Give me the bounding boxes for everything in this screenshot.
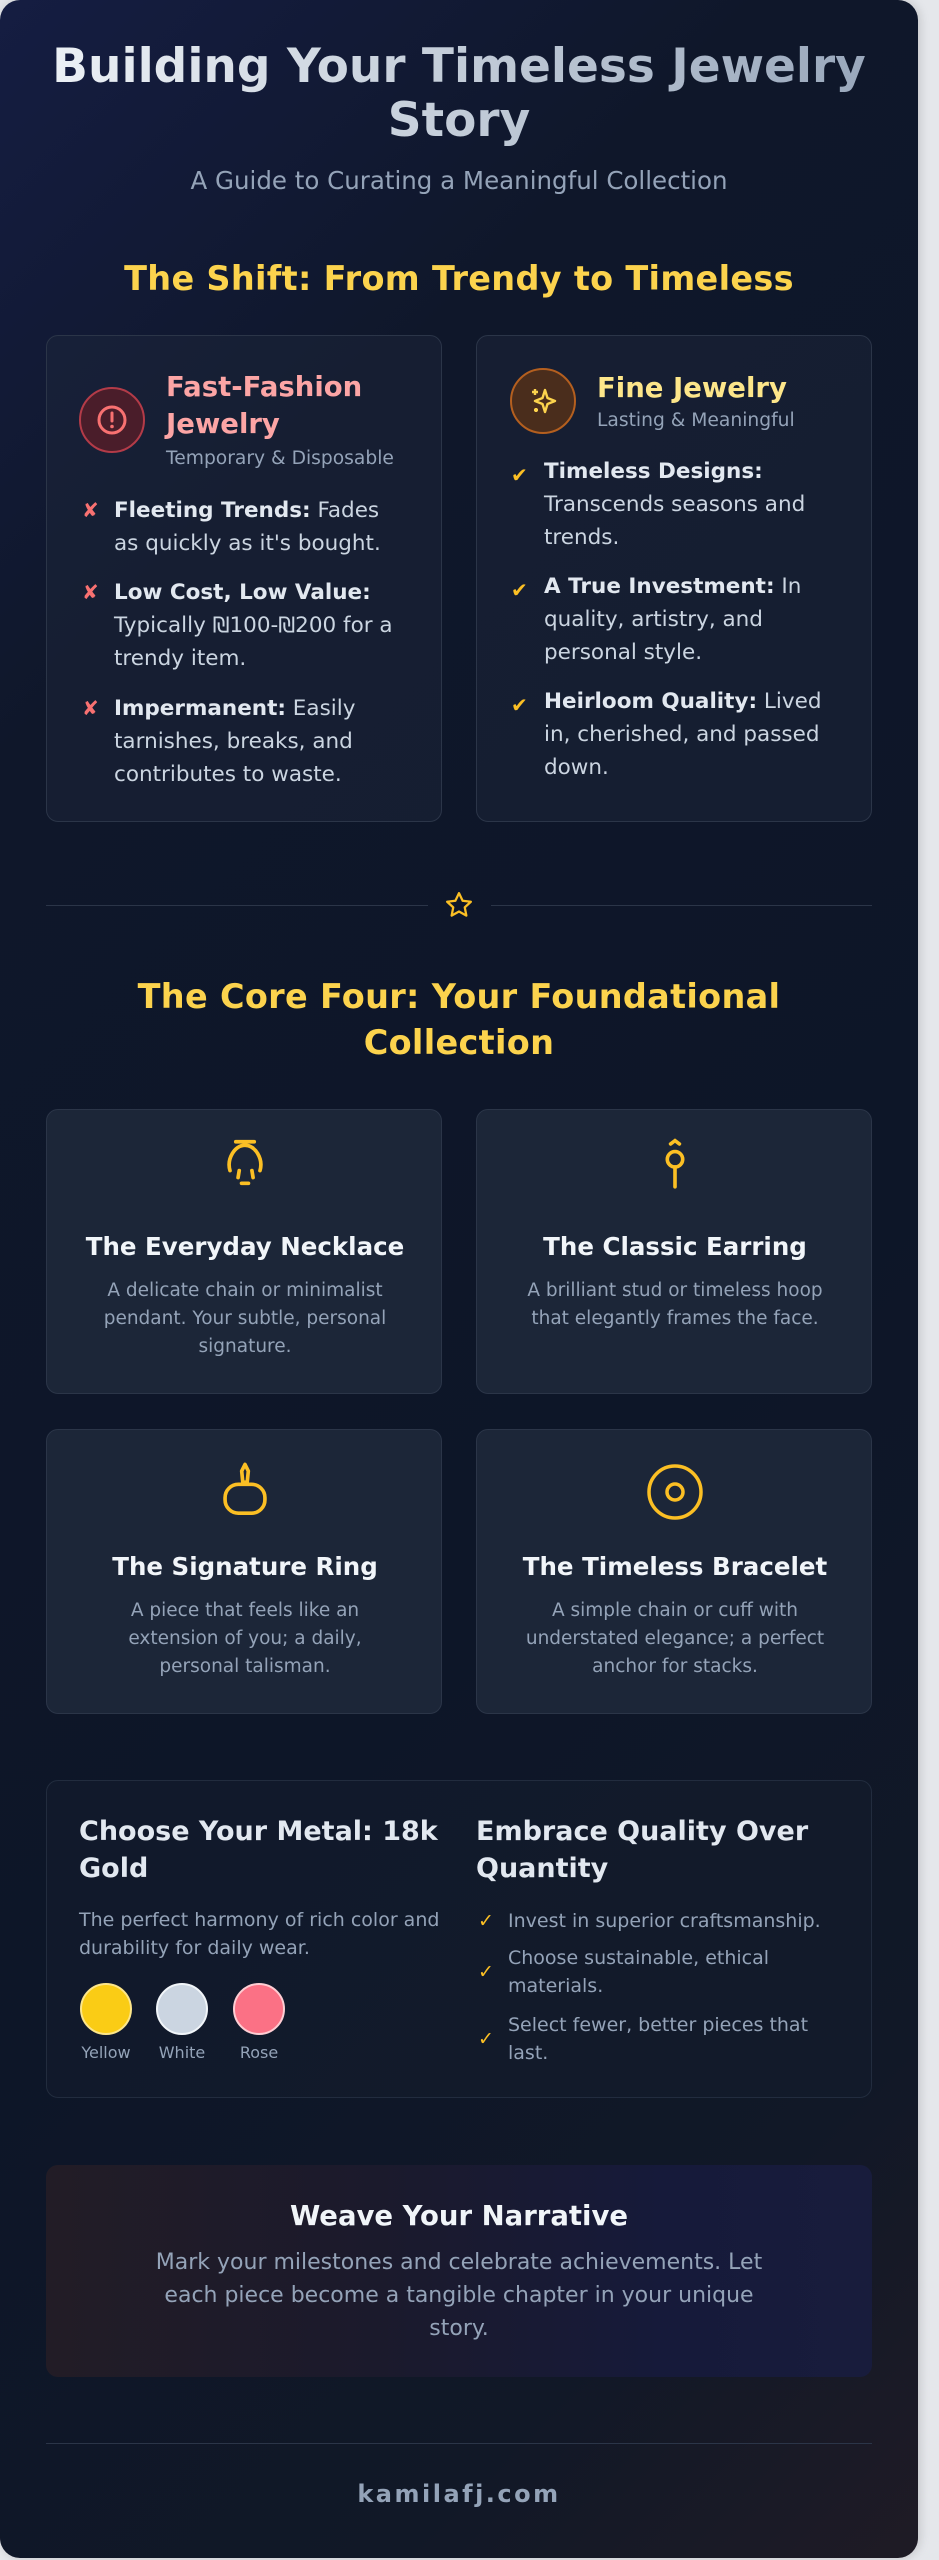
- card description: A piece that feels like an extension of you; a daily, personal talisman.: [128, 1600, 362, 1677]
- list: drawbacks: ✘: [82, 580, 99, 604]
- swatch: white: [156, 1983, 208, 2062]
- swatch: yellow: Yellow: [81, 2043, 131, 2062]
- title: [0, 40, 918, 148]
- list: quality points: ✓: [478, 2028, 494, 2050]
- list: drawbacks: Low Cost, Low Value: Typically ₪100-₪200 for a trendy item.: [114, 580, 393, 671]
- callout: weave your narrative: [46, 2165, 872, 2377]
- heading: the shift: The Shift: From Trendy to Timeless: [124, 259, 794, 298]
- title: Story: [388, 93, 530, 148]
- card description: A delicate chain or minimalist pendant. Your subtle, personal signature.: [104, 1280, 386, 1357]
- panel title: Fast-Fashion: [166, 371, 362, 403]
- heading: metal: Gold: [79, 1853, 148, 1884]
- list: quality points: ✓: [478, 1961, 494, 1983]
- list: drawbacks: [82, 498, 393, 787]
- card title: The Signature Ring: [112, 1552, 378, 1581]
- list: drawbacks: ✘: [82, 498, 99, 522]
- panel title: [164, 371, 362, 440]
- card title: The Timeless Bracelet: [523, 1552, 827, 1581]
- icon: bracelet: [647, 1464, 703, 1520]
- heading: core four: [138, 977, 780, 1062]
- list: benefits: Heirloom Quality: Lived in, cherished, and passed down.: [544, 689, 821, 780]
- icon: star divider: [446, 892, 472, 917]
- panel subtitle: Temporary & Disposable: [166, 448, 394, 469]
- panel: metal and quality: [46, 1780, 872, 2098]
- card description: A brilliant stud or timeless hoop that elegantly frames the face.: [527, 1280, 823, 1329]
- panel title: Jewelry: [166, 408, 280, 440]
- swatch: white: White: [159, 2043, 205, 2062]
- panel title: Fine Jewelry: [597, 372, 787, 404]
- subtitle: A Guide to Curating a Meaningful Collection: [190, 166, 728, 195]
- card description: A simple chain or cuff with understated elegance; a perfect anchor for stacks.: [526, 1600, 824, 1677]
- swatch: yellow: [80, 1983, 132, 2062]
- list: benefits: ✔: [511, 463, 528, 487]
- heading: quality: Quantity: [476, 1853, 608, 1884]
- list: drawbacks: Impermanent: Easily tarnishes, breaks, and contributes to waste.: [114, 696, 355, 787]
- card: bracelet: [476, 1429, 872, 1714]
- footer: kamilafj.com: [357, 2480, 561, 2508]
- title: Building Your Timeless Jewelry: [52, 39, 866, 94]
- list: quality points: Select fewer, better pieces that last.: [508, 2014, 808, 2064]
- list: quality points: Choose sustainable, ethical materials.: [508, 1947, 769, 1997]
- icon: ring: [223, 1462, 267, 1515]
- list: drawbacks: ✘: [82, 696, 99, 720]
- swatches: [80, 1983, 285, 2062]
- icon: earring: [666, 1138, 684, 1189]
- icon: sparkle: [510, 368, 576, 434]
- card: ring: [46, 1429, 442, 1714]
- swatch: rose: Rose: [240, 2043, 278, 2062]
- list: benefits: ✔: [511, 578, 528, 602]
- list: quality points: ✓: [478, 1910, 494, 1932]
- heading: quality: [476, 1816, 808, 1884]
- heading: core four: The Core Four: Your Foundational: [138, 977, 780, 1016]
- icon: warning: [79, 387, 145, 453]
- card: earring: [476, 1109, 872, 1394]
- panel: fast-fashion: [46, 335, 442, 822]
- text: metal description: The perfect harmony of rich color and durability for daily wear.: [79, 1909, 439, 1959]
- list: quality points: [478, 1910, 821, 2064]
- heading: quality: Embrace Quality Over: [476, 1816, 808, 1847]
- list: quality points: Invest in superior craftsmanship.: [508, 1910, 821, 1932]
- swatch: rose: [233, 1983, 285, 2062]
- list: benefits: ✔: [511, 693, 528, 717]
- card title: The Classic Earring: [543, 1232, 807, 1261]
- heading: metal: [79, 1816, 438, 1884]
- callout title: Weave Your Narrative: [290, 2200, 628, 2232]
- list: benefits: [511, 459, 821, 780]
- list: drawbacks: Fleeting Trends: Fades as quickly as it's bought.: [114, 498, 381, 556]
- panel: fine jewelry: [476, 335, 872, 822]
- card title: The Everyday Necklace: [86, 1232, 404, 1261]
- icon: necklace: [227, 1140, 263, 1186]
- heading: metal: Choose Your Metal: 18k: [79, 1816, 438, 1847]
- list: benefits: A True Investment: In quality, artistry, and personal style.: [544, 574, 801, 665]
- panel subtitle: Lasting & Meaningful: [597, 410, 795, 431]
- list: benefits: Timeless Designs: Transcends seasons and trends.: [544, 459, 805, 550]
- card: necklace: [46, 1109, 442, 1394]
- callout text: Mark your milestones and celebrate achievements. Let each piece become a tangible chapter in your unique story.: [156, 2250, 762, 2341]
- heading: core four: Collection: [364, 1023, 554, 1062]
